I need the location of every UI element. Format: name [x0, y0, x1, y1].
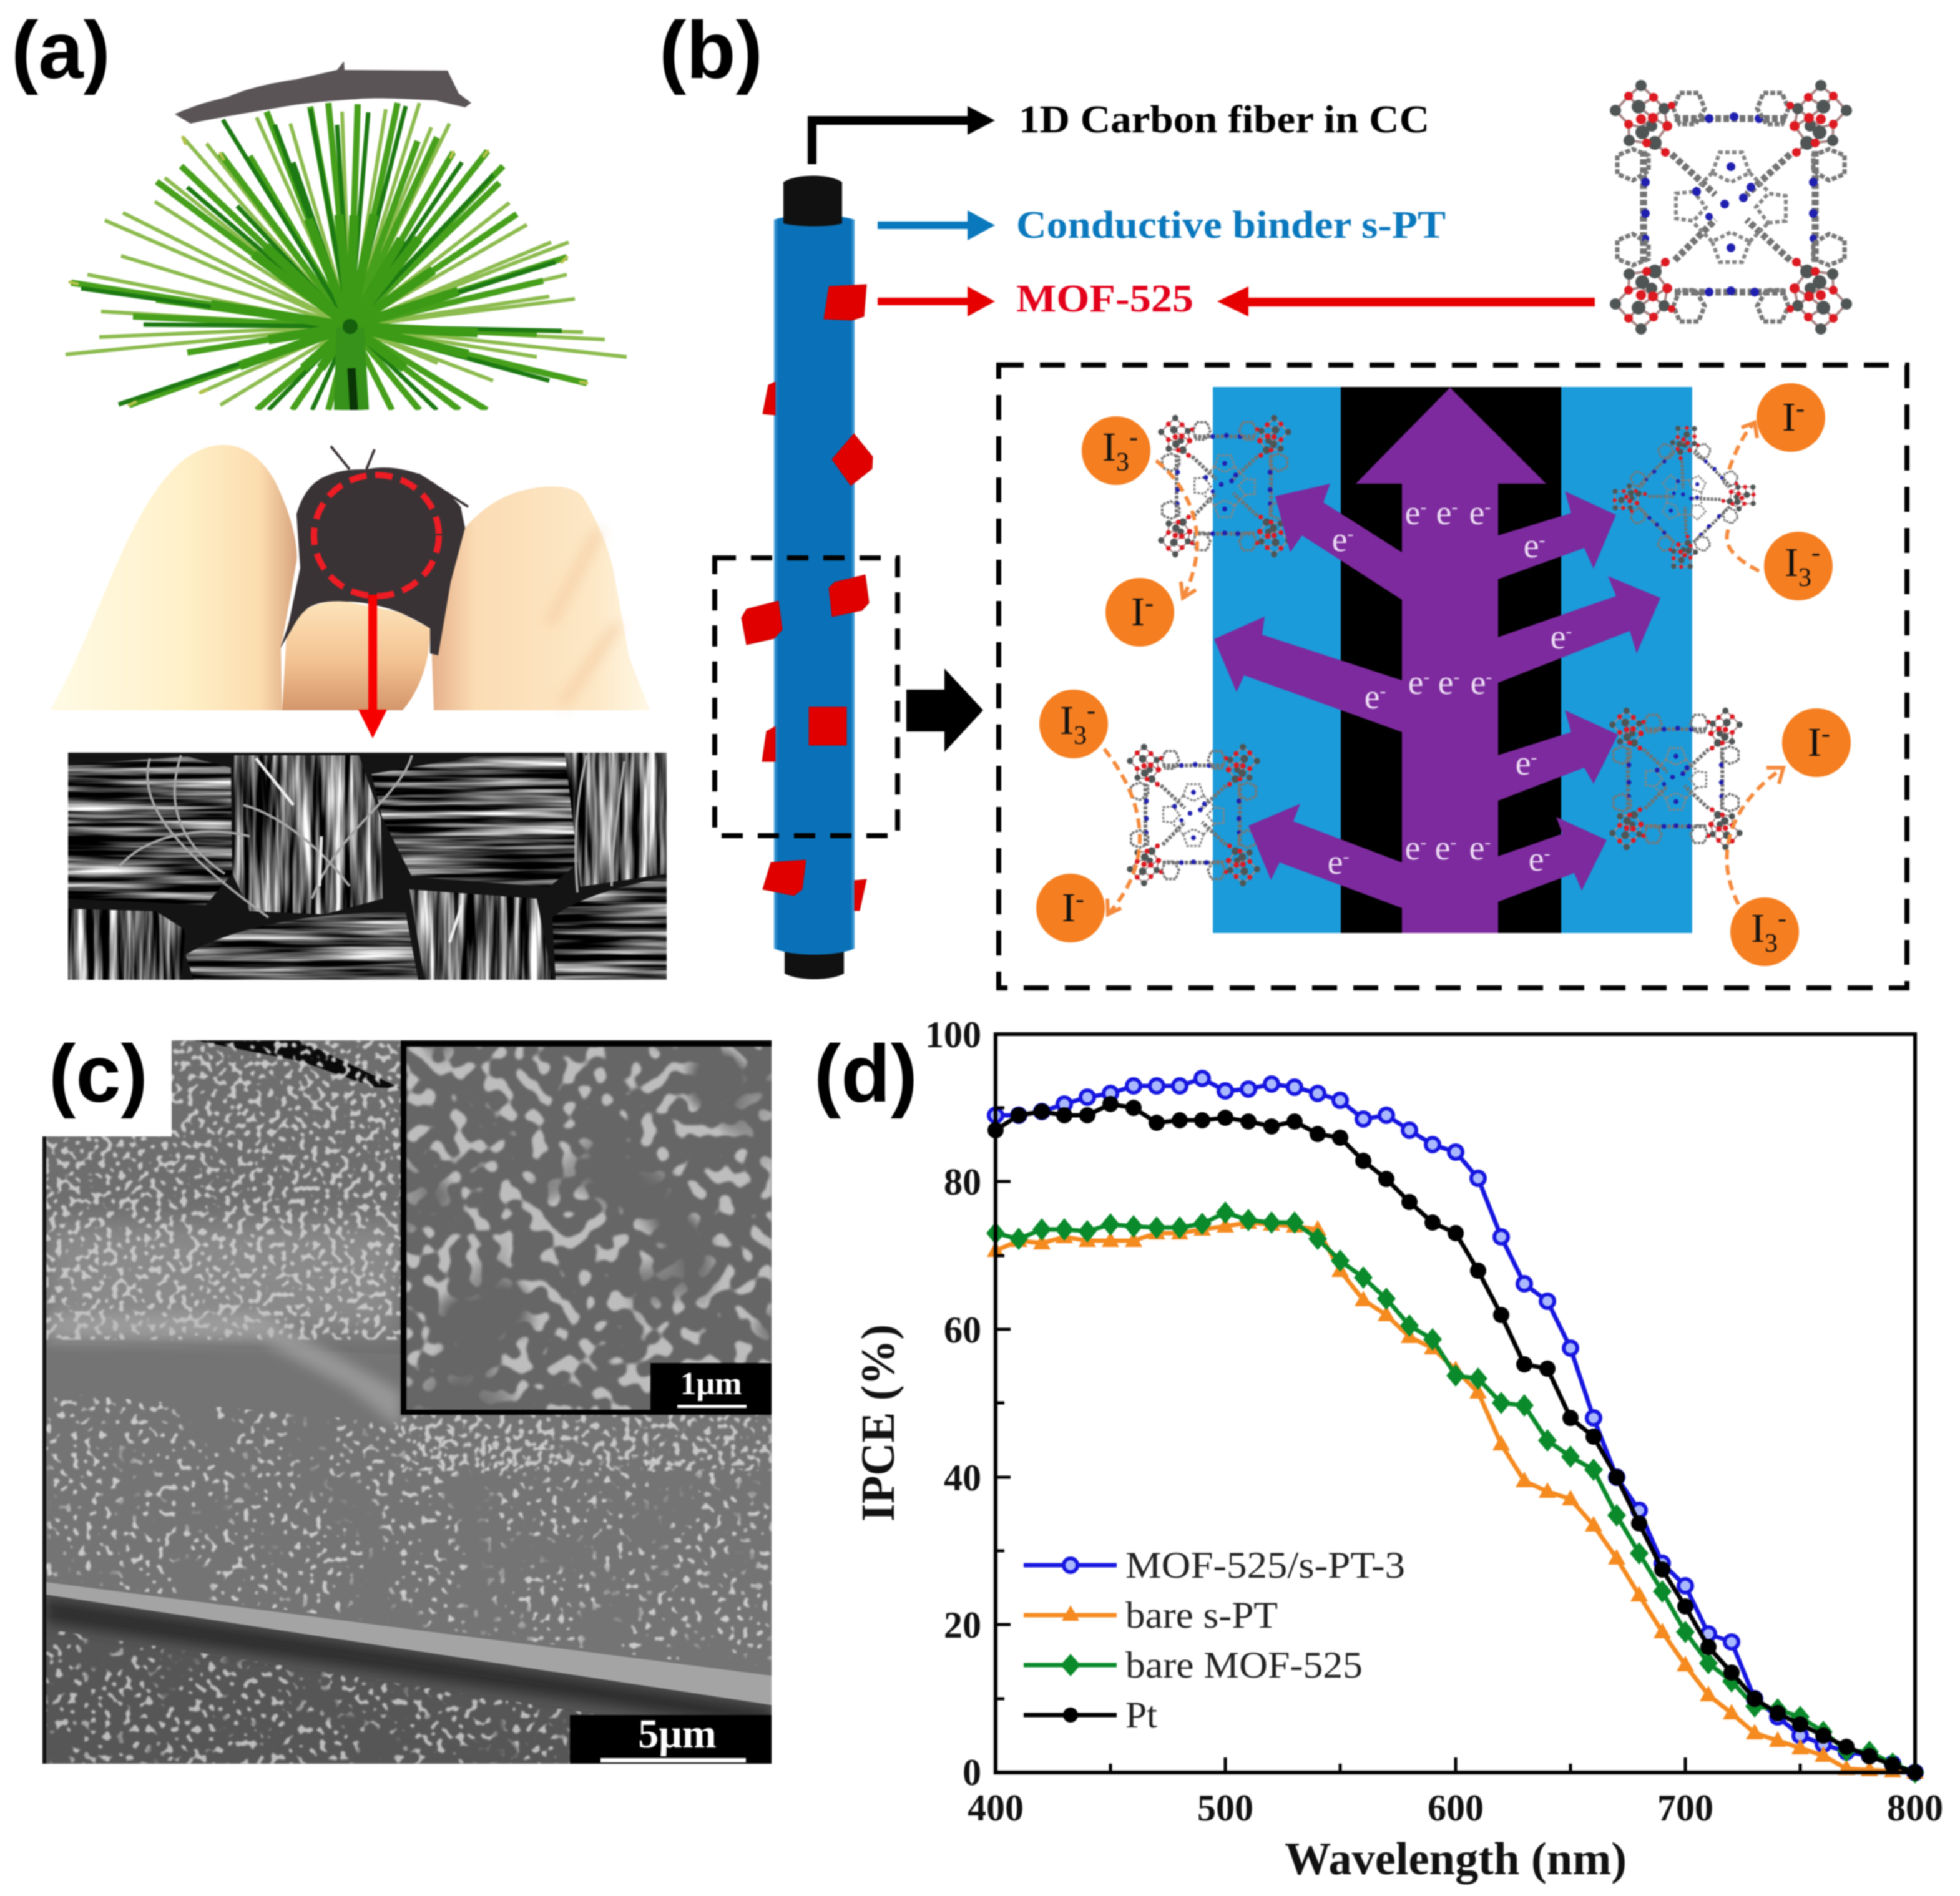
- text: electron labels: -: [1347, 524, 1353, 544]
- text: electron labels: e: [1524, 527, 1539, 565]
- text: electron labels: -: [1423, 667, 1429, 687]
- arrow: orange arrowheads: [1107, 423, 1783, 914]
- series: bare s-PT: [996, 1223, 1915, 1772]
- text: ion labels: -: [1778, 904, 1786, 933]
- text: electron labels: e: [1328, 843, 1343, 882]
- text: electron labels: -: [1420, 832, 1426, 853]
- axis ticks: [996, 1108, 1800, 1772]
- legend: [1024, 1545, 1405, 1736]
- legend: Pt: [1024, 1694, 1157, 1736]
- arrow: blue arrow to binder label: [878, 210, 995, 240]
- text: ion labels: -: [1087, 696, 1095, 725]
- heading: panel c label: [0, 1028, 172, 1764]
- text: 5 micron scale bar: [570, 1711, 772, 1764]
- text: ion labels: -: [1811, 539, 1820, 567]
- x axis labels: 700: [1657, 1787, 1713, 1829]
- text: electron labels: -: [1566, 621, 1572, 642]
- text: electron labels: -: [1450, 832, 1456, 853]
- x axis labels: 600: [1428, 1787, 1484, 1829]
- x axis title: Wavelength (nm): [1285, 1834, 1627, 1885]
- series: bare MOF-525: [996, 1213, 1915, 1772]
- heading: panel c label: (c): [49, 1028, 148, 1119]
- image: SEM inset: [401, 1040, 772, 1415]
- legend: bare s-PT: bare s-PT: [1125, 1595, 1278, 1636]
- image: woven carbon cloth SEM: [68, 753, 667, 980]
- text: electron labels: -: [1420, 497, 1426, 517]
- text: ion labels: I: [1131, 589, 1145, 635]
- text: ion labels: -: [1796, 394, 1805, 423]
- text: electron labels: -: [1539, 530, 1545, 550]
- text: ion labels: 3: [1116, 448, 1129, 477]
- text: electron labels: e: [1529, 840, 1544, 879]
- text: electron labels: e: [1438, 663, 1453, 702]
- text: electron labels: e: [1365, 678, 1379, 716]
- arrow: red arrow to MOF-525 label: [878, 286, 995, 316]
- text: electron labels: -: [1453, 667, 1459, 687]
- text: ion labels: -: [1129, 423, 1138, 452]
- arrow: black arrow to enlarged view: [906, 668, 983, 752]
- legend: MOF-525/s-PT-3: MOF-525/s-PT-3: [1125, 1545, 1405, 1586]
- text: electron labels: e: [1436, 494, 1451, 532]
- callout: red dashed circle: [314, 475, 439, 596]
- text: 1 micron scale bar: 1μm: [680, 1366, 742, 1402]
- x axis labels: 400: [968, 1787, 1024, 1829]
- arrow: purple electron flow arrows: [1214, 388, 1660, 933]
- text: ion labels: 3: [1765, 929, 1778, 958]
- text: 1 micron scale bar: [650, 1363, 772, 1415]
- image: fiber SEM background: [45, 1039, 773, 1765]
- text: electron labels: e: [1332, 520, 1347, 559]
- text: ion labels: 3: [1074, 721, 1087, 750]
- series: Pt: [996, 1104, 1915, 1772]
- text: binder label: Conductive binder s-PT: [1016, 204, 1446, 247]
- arrow: red arrow from molecule: [1217, 286, 1595, 316]
- x axis labels: 800: [1887, 1787, 1943, 1829]
- heading: panel b label: (b): [659, 4, 763, 95]
- text: 5 micron scale bar: 5μm: [638, 1711, 717, 1757]
- icon: MOF-525 crystals: [742, 285, 873, 911]
- text: electron labels: -: [1379, 681, 1386, 701]
- text: ion labels: [1060, 394, 1830, 958]
- heading: panel a label: (a): [11, 4, 110, 95]
- panel a: carbon cloth photos and SEM: [11, 4, 667, 980]
- axes frame: [996, 1034, 1915, 1772]
- text: electron labels: e: [1516, 744, 1531, 783]
- text: electron labels: [1328, 494, 1572, 882]
- text: ion labels: I: [1062, 885, 1076, 931]
- arrow: orange dashed redox arrows: [1104, 424, 1783, 914]
- text: electron labels: -: [1451, 497, 1458, 517]
- text: electron labels: -: [1484, 832, 1491, 853]
- y axis labels: 0: [963, 1752, 981, 1793]
- text: ion labels: I: [1060, 698, 1074, 743]
- text: electron labels: -: [1544, 843, 1550, 864]
- text: electron labels: e: [1551, 618, 1566, 657]
- text: electron labels: e: [1408, 663, 1423, 702]
- panel b: schematic: [659, 4, 1907, 988]
- series: MOF-525/s-PT-3: [996, 1078, 1915, 1772]
- legend: bare MOF-525: bare MOF-525: [1125, 1644, 1363, 1686]
- arrow: red arrow to SEM image: [358, 595, 387, 738]
- text: electron labels: -: [1531, 747, 1537, 768]
- y axis title: IPCE (%): [852, 1324, 904, 1522]
- legend: MOF-525/s-PT-3: [1024, 1545, 1405, 1586]
- text: ion labels: -: [1145, 589, 1154, 618]
- text: electron labels: e: [1405, 494, 1420, 532]
- legend: bare MOF-525: [1024, 1644, 1363, 1686]
- diagram: coated carbon fiber: [742, 176, 873, 979]
- y axis labels: [925, 1014, 981, 1793]
- text: ion labels: 3: [1798, 564, 1811, 592]
- arrow: black arrow to 1D carbon fiber label: [808, 106, 995, 164]
- heading: panel d label: (d): [814, 1028, 918, 1119]
- y axis labels: 100: [925, 1014, 981, 1055]
- text: carbon fiber label: 1D Carbon fiber in CC: [1019, 99, 1429, 141]
- legend: Pt: Pt: [1125, 1694, 1157, 1736]
- chart: IPCE versus wavelength: [852, 1014, 1943, 1885]
- text: electron labels: e: [1471, 663, 1486, 702]
- y axis labels: 60: [944, 1309, 981, 1351]
- x axis labels: 500: [1197, 1787, 1253, 1829]
- callout: small dashed selection box: [715, 558, 898, 836]
- text: electron labels: -: [1343, 846, 1349, 867]
- text: ion labels: -: [1076, 885, 1084, 914]
- icon: MOF molecules: [1127, 415, 1765, 886]
- text: electron labels: e: [1469, 829, 1484, 867]
- text: ion labels: I: [1751, 906, 1765, 951]
- photo: fingers bending carbon cloth: [50, 445, 650, 710]
- photo: carbon cloth on a plant: [66, 61, 627, 410]
- text: ion labels: -: [1821, 720, 1830, 748]
- panel d: IPCE chart: [814, 1014, 1943, 1885]
- panel c: SEM image of MOF particles on fiber: [41, 1039, 773, 1765]
- text: MOF-525 label: MOF-525: [1016, 278, 1193, 320]
- text: ion labels: I: [1808, 720, 1821, 765]
- legend: bare s-PT: [1024, 1595, 1278, 1636]
- icon: orange ion circles: [1036, 383, 1851, 966]
- y axis labels: 20: [944, 1605, 981, 1646]
- text: electron labels: e: [1469, 494, 1484, 532]
- text: ion labels: I: [1785, 540, 1798, 585]
- x axis labels: [968, 1787, 1943, 1829]
- text: electron labels: -: [1486, 667, 1492, 687]
- y axis labels: 40: [944, 1457, 981, 1498]
- diagram: electron transport mechanism: [1036, 383, 1851, 966]
- y axis labels: 80: [944, 1161, 981, 1203]
- text: ion labels: I: [1782, 394, 1796, 440]
- text: ion labels: I: [1102, 424, 1116, 470]
- icon: MOF-525 molecular structure: [1610, 80, 1852, 335]
- callout: large dashed box: [999, 365, 1907, 988]
- text: electron labels: e: [1405, 829, 1420, 867]
- text: electron labels: -: [1484, 497, 1491, 517]
- text: electron labels: e: [1435, 829, 1450, 867]
